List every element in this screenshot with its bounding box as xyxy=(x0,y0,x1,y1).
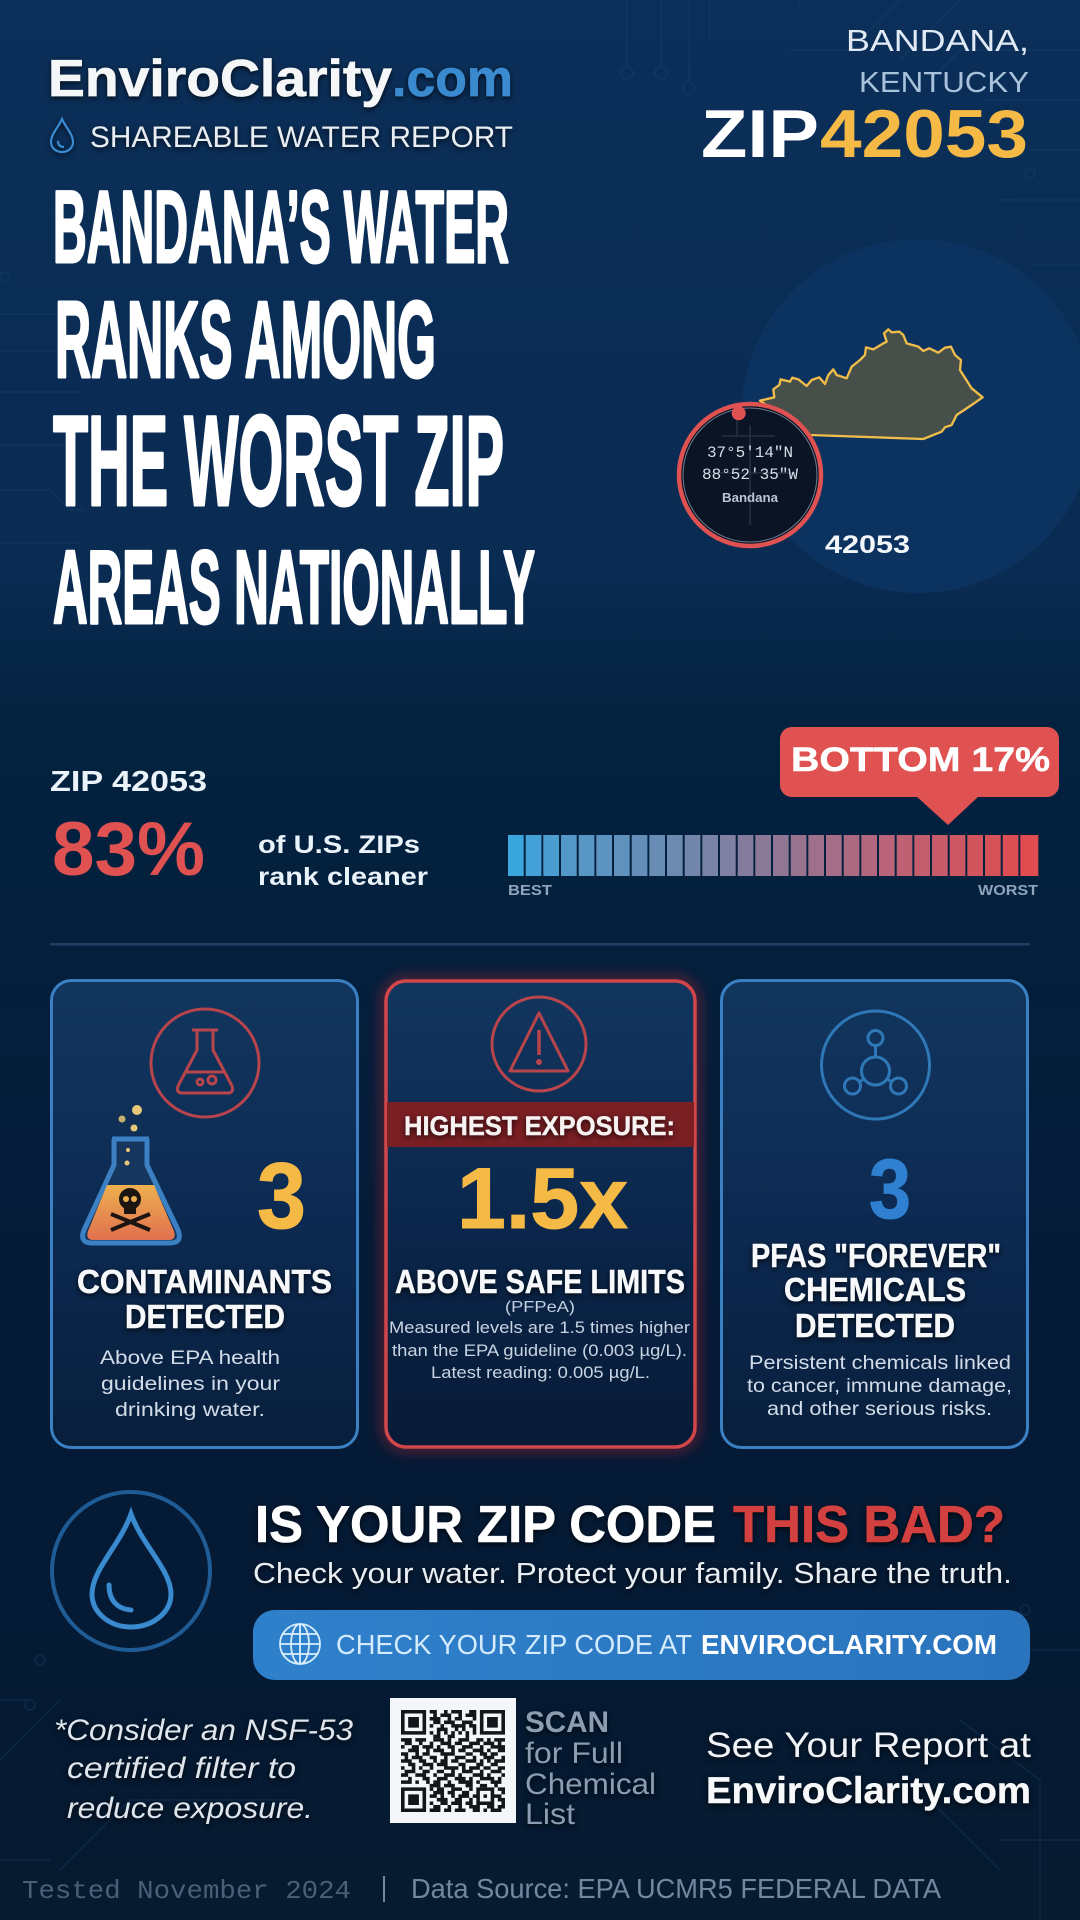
exposure banner xyxy=(387,1102,694,1147)
call to action heading: THIS BAD? xyxy=(733,1496,1005,1554)
filter note xyxy=(54,1714,353,1825)
scan label: for Full xyxy=(525,1737,623,1770)
icon: globe xyxy=(280,1624,320,1664)
bar label best: BEST xyxy=(508,883,552,899)
card heading: PFAS "FOREVER" xyxy=(751,1237,1001,1274)
scan label: List xyxy=(525,1798,576,1831)
text: AREAS NATIONALLY xyxy=(53,530,535,646)
card description: to cancer, immune damage, xyxy=(747,1376,1012,1397)
logo name: EnviroClarity xyxy=(48,50,392,108)
text: THE WORST ZIP xyxy=(53,390,504,533)
stat caption: of U.S. ZIPs xyxy=(258,831,420,859)
map backdrop circle xyxy=(741,239,1080,593)
zip code: 42053 xyxy=(820,96,1028,172)
card description: guidelines in your xyxy=(101,1374,281,1395)
panel: contaminants xyxy=(52,980,358,1448)
stat caption xyxy=(258,831,428,891)
icon: water drop badge xyxy=(52,1492,210,1650)
callout: bottom 17% xyxy=(780,727,1059,825)
icon: molecule badge xyxy=(822,1011,930,1119)
filter note: certified filter to xyxy=(67,1752,296,1785)
card heading: DETECTED xyxy=(125,1298,285,1335)
report link xyxy=(706,1726,1031,1811)
text: BANDANA’S WATER xyxy=(53,170,509,284)
card description xyxy=(100,1348,281,1421)
card description: Above EPA health xyxy=(100,1348,280,1369)
skull and crossbones xyxy=(111,1188,150,1230)
scan label xyxy=(525,1706,656,1831)
title: RANKS AMONG xyxy=(55,279,436,401)
percentile bar xyxy=(508,835,1038,899)
stat caption: rank cleaner xyxy=(258,863,428,891)
map zip label: 42053 xyxy=(825,531,910,559)
QR code xyxy=(390,1698,516,1823)
title xyxy=(53,170,535,646)
state outline xyxy=(760,329,983,439)
button text xyxy=(336,1629,997,1660)
coordinates: 88°52′35″W xyxy=(702,466,798,484)
contaminant name: (PFPeA) xyxy=(505,1299,575,1316)
call to action heading: IS YOUR ZIP CODE xyxy=(255,1496,716,1554)
bar label worst: WORST xyxy=(978,883,1038,899)
button text: CHECK YOUR ZIP CODE AT xyxy=(336,1629,692,1660)
card heading: CONTAMINANTS xyxy=(77,1263,332,1300)
percent stat: 83% xyxy=(52,807,205,892)
icon: water drop small xyxy=(51,119,73,152)
card description xyxy=(389,1318,690,1382)
button text: ENVIROCLARITY.COM xyxy=(701,1629,997,1660)
card description: Measured levels are 1.5 times higher xyxy=(389,1318,690,1337)
zip code: ZIP xyxy=(701,96,819,172)
zip label: ZIP 42053 xyxy=(50,766,207,798)
callout: bottom 17%: BOTTOM 17% xyxy=(791,741,1050,779)
stat: 3 PFAS: 3 xyxy=(869,1142,911,1236)
card heading xyxy=(751,1237,1001,1344)
icon: flask badge xyxy=(151,1009,259,1117)
card heading: ABOVE SAFE LIMITS xyxy=(395,1263,685,1300)
data source: Data Source: EPA UCMR5 FEDERAL DATA xyxy=(411,1873,941,1904)
card description: Latest reading: 0.005 µg/L. xyxy=(431,1363,650,1382)
city: BANDANA, xyxy=(846,23,1029,58)
card description: drinking water. xyxy=(115,1400,265,1421)
location pin xyxy=(732,406,746,420)
footer xyxy=(22,1873,941,1906)
panel: highest exposure xyxy=(386,981,695,1447)
call to action subheading: Check your water. Protect your family. Share the truth. xyxy=(253,1558,1012,1590)
filter note: reduce exposure. xyxy=(67,1792,313,1825)
exposure banner: HIGHEST EXPOSURE: xyxy=(404,1111,675,1141)
stat: 1.5x: 1.5x xyxy=(457,1151,628,1247)
zip code xyxy=(701,96,1028,172)
map: Kentucky with locator xyxy=(679,329,983,559)
logo name xyxy=(48,50,513,108)
call to action heading xyxy=(255,1496,1005,1554)
panel: PFAS xyxy=(722,980,1028,1448)
stat: 3 contaminants: 3 xyxy=(257,1143,306,1248)
rank summary xyxy=(50,766,428,892)
subtitle: SHAREABLE WATER REPORT xyxy=(90,121,513,154)
locator circle xyxy=(679,404,821,546)
icon: toxic flask xyxy=(83,1105,179,1243)
card description: than the EPA guideline (0.003 µg/L). xyxy=(392,1341,687,1360)
card heading: CHEMICALS xyxy=(784,1271,966,1308)
card description: Persistent chemicals linked xyxy=(749,1353,1011,1374)
icon: warning badge xyxy=(492,997,586,1091)
card heading xyxy=(77,1263,332,1335)
filter note: *Consider an NSF-53 xyxy=(54,1714,353,1747)
place name: Bandana xyxy=(722,490,779,505)
button xyxy=(253,1610,1030,1680)
card description: and other serious risks. xyxy=(767,1399,992,1420)
coordinates: 37°5′14″N xyxy=(707,444,793,462)
report link: See Your Report at xyxy=(706,1726,1031,1765)
logo name: .com xyxy=(392,50,513,108)
report link: EnviroClarity.com xyxy=(706,1770,1031,1811)
card heading: DETECTED xyxy=(795,1307,955,1344)
location heading xyxy=(701,23,1029,172)
scan label: SCAN xyxy=(525,1706,609,1739)
test date: Tested November 2024 xyxy=(22,1876,351,1906)
scan label: Chemical xyxy=(525,1768,656,1801)
separator xyxy=(383,1876,385,1902)
coordinates xyxy=(702,444,798,484)
state: KENTUCKY xyxy=(859,67,1029,99)
card description xyxy=(747,1353,1012,1420)
header logo xyxy=(48,50,513,154)
